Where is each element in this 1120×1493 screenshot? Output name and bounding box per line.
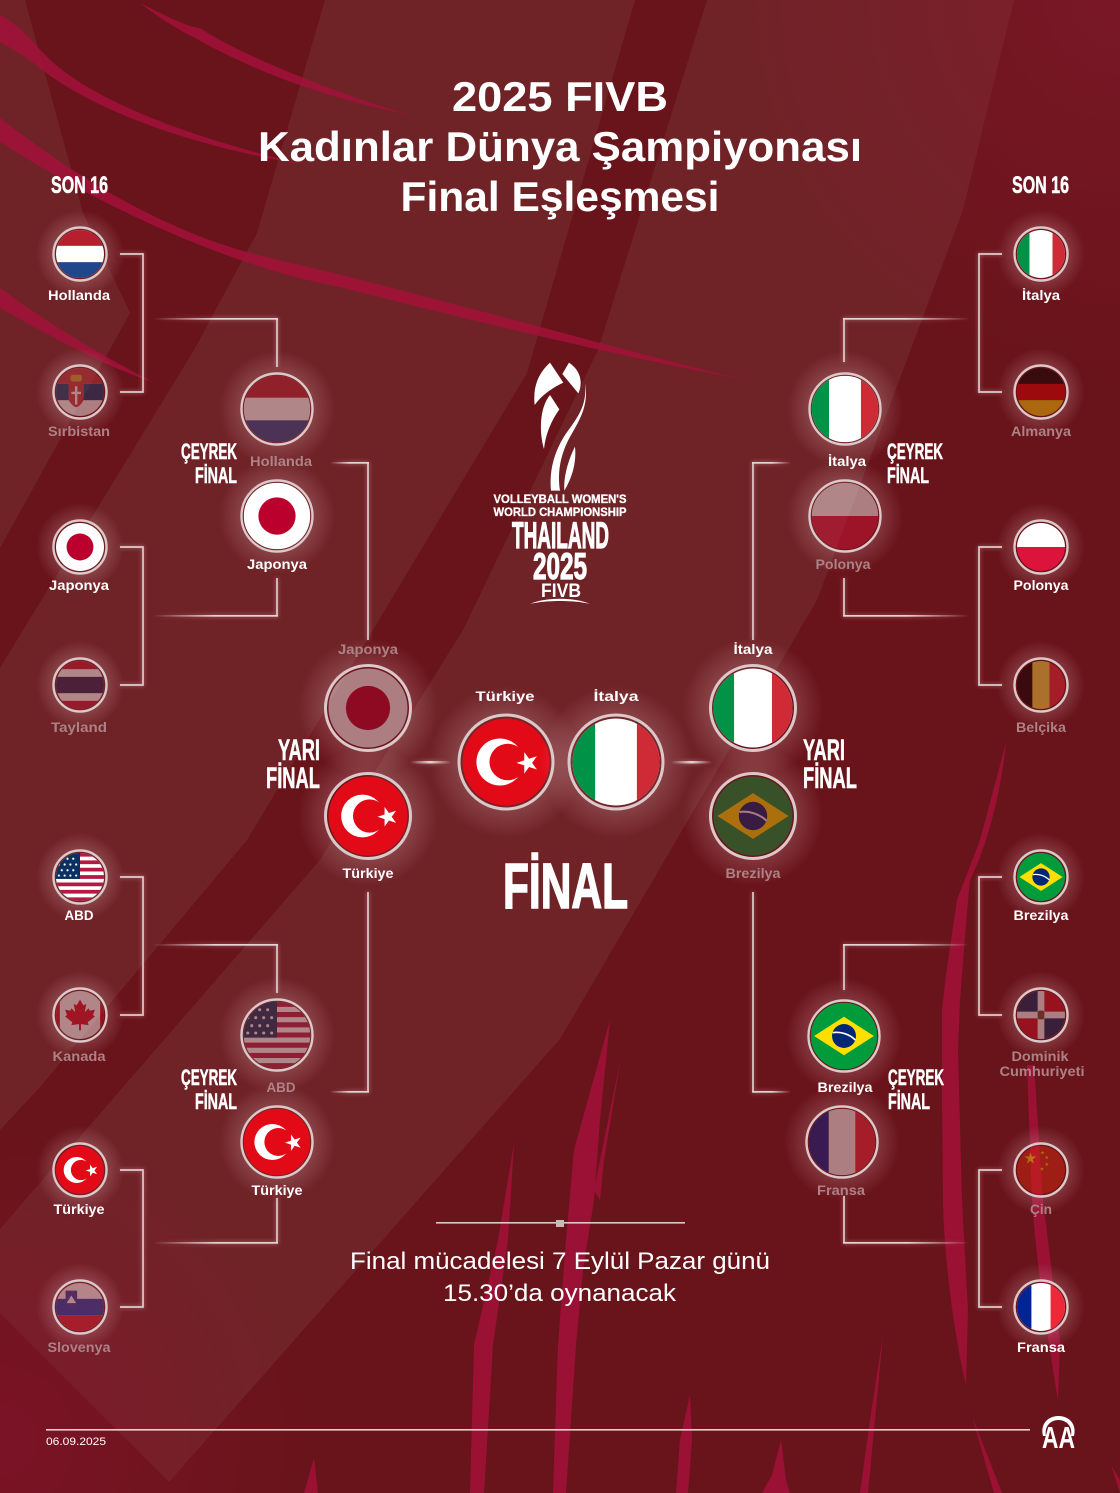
team: Fransa çeyrek final: Fransa [817,1183,866,1198]
team: Dominik Cumhuriyeti son 16 [997,971,1085,1079]
logo: FIVB world championship: FIVB [541,581,581,602]
team: Türkiye yarı final: Türkiye [342,866,394,881]
team: Sırbistan son 16: Sırbistan [48,424,110,439]
team: Belçika son 16 [997,641,1085,735]
team: Almanya son 16: Almanya [1011,424,1072,439]
team: Hollanda çeyrek final: Hollanda [250,454,313,469]
team: ABD son 16: ABD [64,908,94,923]
team: Brezilya son 16 [997,833,1085,923]
label: yarı final left [266,734,320,795]
title [258,73,862,220]
label: yarı final left: YARI [278,734,320,767]
team: Türkiye çeyrek final [219,1084,335,1200]
team: Brezilya son 16: Brezilya [1014,908,1069,923]
label: çeyrek final bottom left: FİNAL [195,1089,237,1114]
team: Kanada son 16 [36,971,124,1064]
team: İtalya yarı final [683,638,823,778]
team: İtalya finalist [540,686,692,838]
team: İtalya son 16 [997,210,1085,303]
team: Dominik Cumhuriyeti son 16: Dominik [1012,1049,1069,1064]
label: çeyrek final bottom right [888,1065,944,1114]
team: Sırbistan son 16 [36,348,124,439]
team: Türkiye finalist: Türkiye [476,689,535,704]
label: çeyrek final bottom right: ÇEYREK [888,1065,944,1090]
text: final date: Final mücadelesi 7 Eylül Pazar günü [350,1248,770,1275]
logo: FIVB world championship: THAILAND [512,515,609,556]
team: Kanada son 16: Kanada [52,1049,106,1064]
label: çeyrek final top left: ÇEYREK [181,439,237,464]
team: Slovenya son 16 [36,1263,124,1355]
icon: volleyball trophy [534,363,586,491]
divider with square [436,1220,685,1227]
team: Polonya son 16 [997,503,1085,593]
label: yarı final left: FİNAL [266,762,320,795]
team: Fransa çeyrek final [784,1084,900,1200]
label: çeyrek final top left: FİNAL [195,463,237,488]
logo: FIVB world championship: 2025 [533,546,587,587]
text: final date [350,1248,770,1307]
team: İtalya yarı final: İtalya [734,642,773,657]
title: 2025 FIVB [452,73,668,120]
team: Almanya son 16 [997,348,1085,439]
logo: FIVB world championship: VOLLEYBALL WOMEN'S [494,494,627,506]
label: yarı final right [803,734,857,795]
label: çeyrek final bottom right: FİNAL [888,1089,930,1114]
team: Hollanda son 16 [36,210,124,303]
team: Japonya yarı final: Japonya [338,642,399,657]
team: Japonya son 16: Japonya [49,578,110,593]
label: çeyrek final top right: ÇEYREK [887,439,943,464]
team: Tayland son 16 [36,641,124,735]
team: Tayland son 16: Tayland [51,720,107,735]
logo: FIVB world championship: WORLD CHAMPIONSHIP [494,507,627,519]
team: Çin son 16: Çin [1030,1202,1052,1217]
team: Türkiye yarı final [298,746,438,886]
team: Türkiye son 16: Türkiye [54,1202,105,1217]
team: Türkiye son 16 [36,1126,124,1217]
team: Polonya çeyrek final: Polonya [816,557,871,572]
logo: AA [1042,1416,1075,1455]
heading: final: FİNAL [503,850,628,922]
team: ABD çeyrek final [219,977,335,1095]
team: Polonya son 16: Polonya [1014,578,1069,593]
logo: AA: AA [1042,1420,1075,1455]
team: Japonya son 16 [36,503,124,593]
team: Türkiye finalist [430,686,582,838]
team: Slovenya son 16: Slovenya [48,1340,111,1355]
label: yarı final right: YARI [803,734,845,767]
bracket lines [120,254,1002,1307]
team: Türkiye çeyrek final: Türkiye [252,1183,303,1198]
heading: son 16 left: SON 16 [51,172,108,199]
team: Polonya çeyrek final [787,458,903,574]
team: Hollanda son 16: Hollanda [48,288,111,303]
heading: son 16 right: SON 16 [1012,172,1069,199]
team: İtalya çeyrek final: İtalya [828,454,867,469]
team: Japonya yarı final [298,638,438,778]
title: Kadınlar Dünya Şampiyonası [258,123,862,170]
team: Japonya çeyrek final [219,458,335,574]
footer rule [46,1429,1030,1431]
team: ABD son 16 [36,833,124,923]
logo: FIVB world championship [494,363,627,604]
label: çeyrek final bottom left: ÇEYREK [181,1065,237,1090]
team: Belçika son 16: Belçika [1016,720,1067,735]
team: Çin son 16 [997,1126,1085,1217]
team: Brezilya yarı final [683,746,823,886]
team: Dominik Cumhuriyeti son 16: Cumhuriyeti [1000,1064,1084,1079]
team: Japonya çeyrek final: Japonya [247,557,308,572]
label: çeyrek final top left [181,439,237,488]
team: Brezilya yarı final: Brezilya [726,866,781,881]
label: çeyrek final top right [887,439,943,488]
label: çeyrek final top right: FİNAL [887,463,929,488]
text: final date: 15.30’da oynanacak [443,1280,677,1307]
label: yarı final right: FİNAL [803,762,857,795]
label: çeyrek final bottom left [181,1065,237,1114]
date: 06.09.2025 [46,1436,106,1448]
team: Hollanda çeyrek final [219,351,335,469]
team: Brezilya çeyrek final [786,978,902,1095]
team: Fransa son 16 [997,1263,1085,1355]
team: İtalya çeyrek final [787,351,903,469]
team: ABD çeyrek final: ABD [266,1080,296,1095]
title: Final Eşleşmesi [400,173,720,220]
team: Brezilya çeyrek final: Brezilya [818,1080,873,1095]
team: Fransa son 16: Fransa [1017,1340,1066,1355]
team: İtalya finalist: İtalya [594,689,639,704]
team: İtalya son 16: İtalya [1022,288,1061,303]
